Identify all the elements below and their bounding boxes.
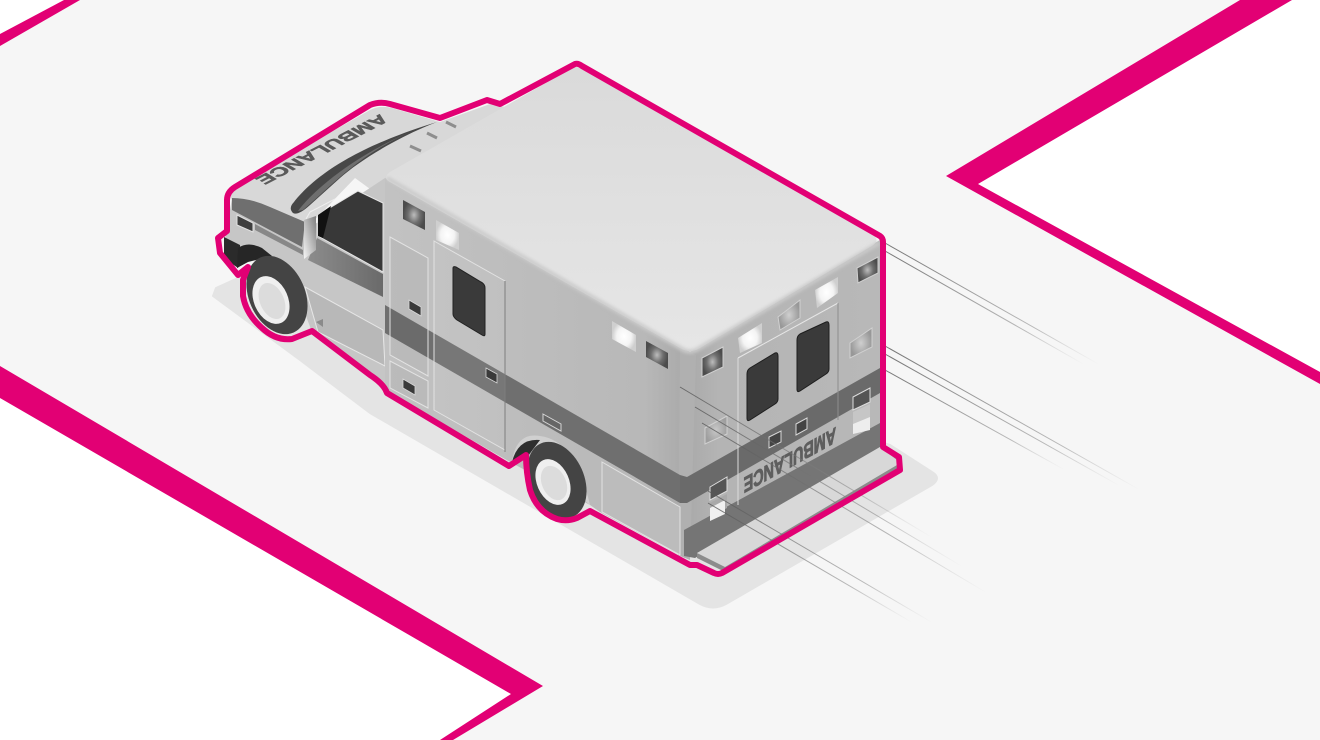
rear side compartment <box>602 462 680 555</box>
rear doors <box>738 303 838 505</box>
side compartment lower <box>390 361 428 408</box>
rear stripe <box>680 368 880 503</box>
motion lines behind vehicle <box>885 243 1140 490</box>
door lower panel <box>305 287 385 366</box>
hood text: AMBULANCE <box>250 112 393 186</box>
roof marker lights <box>410 122 456 151</box>
cab side trim <box>255 224 303 255</box>
side lamps <box>403 200 668 369</box>
rear text: AMBULANCE <box>744 421 836 497</box>
side door window <box>453 267 485 336</box>
door step tab <box>316 319 323 327</box>
front wheel arch <box>237 244 272 268</box>
cab window strip <box>308 238 383 297</box>
side corner shading <box>678 347 696 560</box>
side compartment upper <box>390 237 428 376</box>
box rear wall <box>678 240 880 558</box>
corner: top left <box>0 0 80 46</box>
rear wheel arch inner <box>512 440 540 462</box>
front bumper <box>224 237 240 268</box>
side mirror <box>304 216 316 259</box>
ground shadow <box>213 250 937 608</box>
ambulance <box>224 67 897 572</box>
side stripe <box>385 305 680 503</box>
box side wall <box>385 178 690 558</box>
corner: top right <box>946 0 1320 384</box>
side door <box>434 241 505 450</box>
side stripe plate <box>543 414 561 431</box>
mirror arm <box>306 199 335 219</box>
side handles <box>403 300 670 528</box>
pink vehicle outline <box>218 64 900 574</box>
corner: bottom left <box>0 366 543 740</box>
rear lamps <box>702 257 878 444</box>
rear lower stripe <box>684 423 880 558</box>
cab body <box>225 178 388 388</box>
hood dark band <box>232 198 305 247</box>
windshield <box>291 122 437 214</box>
rear reflectors left <box>710 477 727 521</box>
side door edge <box>504 281 506 452</box>
rear wheel arch <box>512 436 590 505</box>
roof bevel <box>387 178 879 352</box>
grille slot <box>237 215 253 232</box>
motion lines over vehicle <box>680 387 987 623</box>
cab roof and hood <box>230 104 520 232</box>
rear step bumper <box>697 447 897 572</box>
cab side window <box>318 191 383 272</box>
rear door windows <box>747 322 829 421</box>
rear handles <box>769 418 807 448</box>
front wheel <box>235 246 319 344</box>
rear wheel <box>516 432 598 528</box>
rear reflectors right <box>853 388 870 434</box>
roof <box>386 67 876 351</box>
